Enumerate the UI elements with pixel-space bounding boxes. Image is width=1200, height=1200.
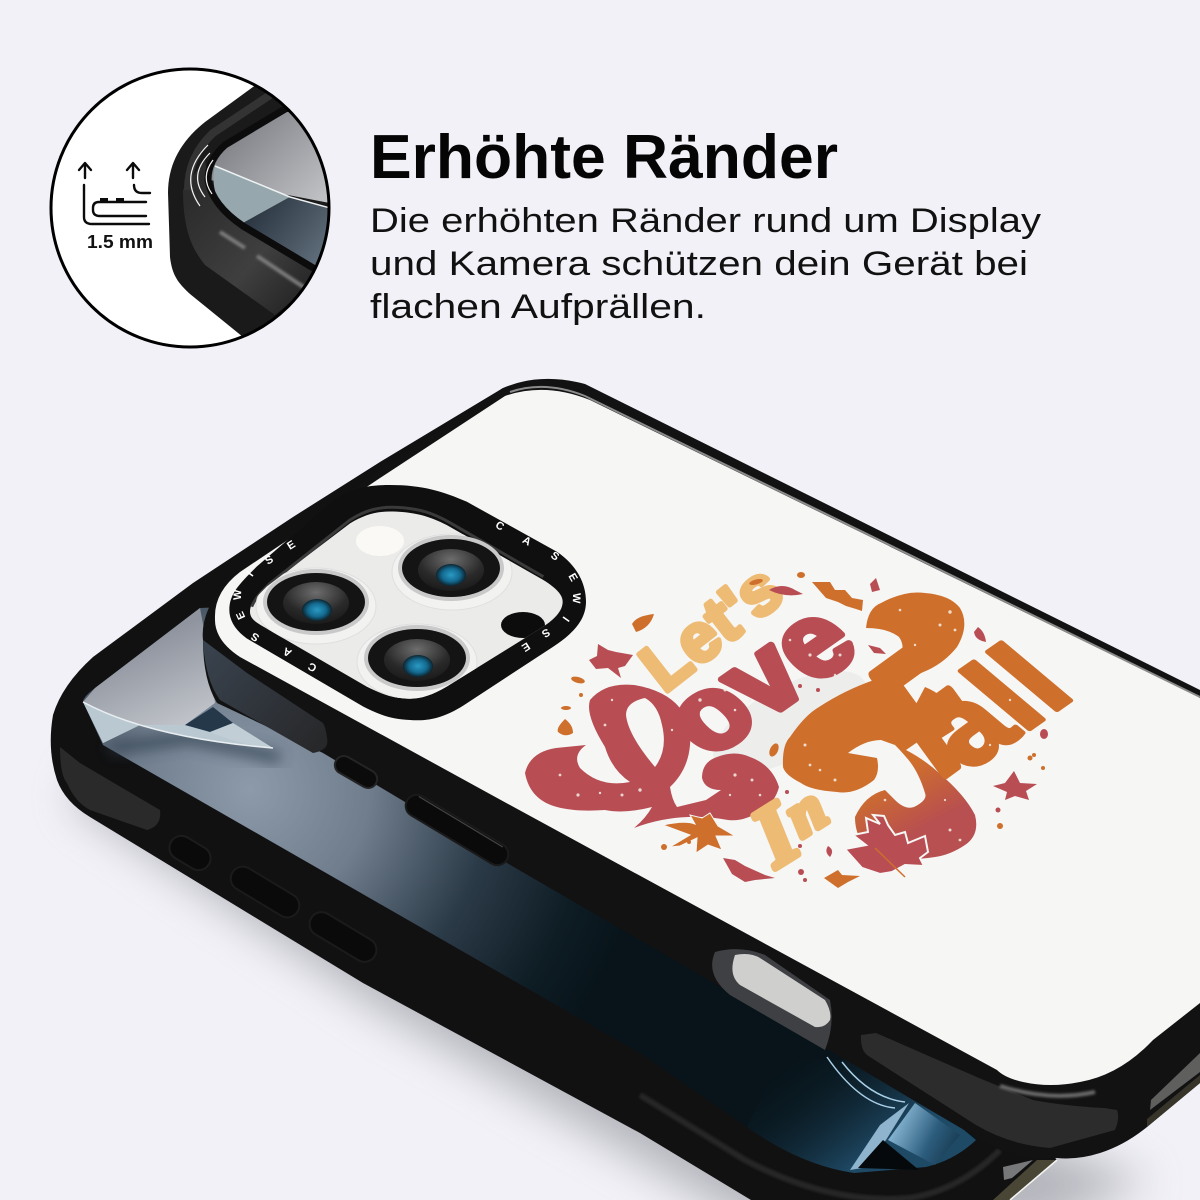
orange F flourish — [783, 592, 976, 859]
lower phone corner pad — [60, 747, 160, 830]
body text: Die erhöhten Ränder rund um Display — [370, 202, 1041, 240]
ring brand lettering: E — [234, 609, 248, 621]
lower phone bumper highlight — [640, 1095, 1000, 1199]
inset bumper lighter wall — [183, 160, 312, 315]
magsafe ghost shadow — [698, 650, 882, 794]
ring brand lettering: E — [519, 640, 532, 654]
volume up button — [226, 862, 304, 922]
speaker grill — [1150, 1053, 1200, 1110]
screen light beam right — [888, 1103, 960, 1165]
screen dark slate strip — [110, 738, 280, 758]
inset white disc — [51, 69, 329, 347]
left orange leaf — [632, 614, 654, 632]
inset pale wedge — [213, 166, 290, 223]
silver charging port piece — [1003, 1160, 1033, 1180]
ring brand lettering: W — [232, 589, 244, 600]
inset bumper — [168, 86, 328, 336]
oak leaf top — [812, 582, 863, 611]
right maple leaf — [993, 771, 1037, 800]
left corner pad — [203, 640, 327, 753]
ring brand lettering: I — [245, 570, 256, 579]
front phone white back surface — [215, 390, 1200, 1085]
screen thin blue curves — [827, 1057, 905, 1108]
ring brand lettering: E — [285, 538, 298, 552]
volume down button — [305, 908, 381, 966]
left maple leaf — [589, 644, 633, 678]
orange maple leaf — [663, 813, 735, 853]
distressed speckle texture — [559, 609, 1011, 841]
camera module — [229, 485, 586, 720]
flash — [356, 526, 404, 556]
word In: I — [734, 784, 817, 885]
word Love: ove — [637, 581, 880, 777]
body text — [370, 202, 1041, 326]
screen navy shape — [185, 707, 233, 732]
camera well — [250, 511, 563, 699]
ring brand lettering: A — [281, 644, 294, 659]
ring brand lettering: C — [306, 659, 319, 674]
letters all: all — [882, 623, 1098, 789]
inset top rim — [188, 95, 270, 190]
inset shock arcs — [191, 145, 213, 206]
ring brand lettering: S — [548, 550, 561, 564]
port surround — [712, 949, 832, 1050]
word Let's: Let's — [626, 550, 796, 706]
screen black triangle — [858, 1140, 919, 1170]
lower phone with screen side up — [51, 388, 1057, 1200]
screen pale curve — [210, 723, 273, 748]
ring brand lettering: I — [560, 614, 571, 623]
silver port — [732, 954, 830, 1027]
microphone hole — [501, 612, 545, 638]
left teardrop leaf — [558, 719, 573, 735]
red L flourish — [525, 685, 779, 828]
icon label: 1.5 mm — [87, 232, 153, 252]
front phone black case — [203, 379, 1200, 1158]
ring brand lettering: S — [249, 630, 262, 644]
ring brand lettering: S — [539, 626, 552, 640]
screen light beam left — [850, 1103, 909, 1170]
icon: raised edge diagram — [79, 163, 150, 224]
camera lens halos, flash and mic — [256, 526, 545, 700]
ring brand lettering: A — [520, 534, 533, 549]
inset white curve — [215, 166, 330, 208]
screen pale wedge — [83, 702, 273, 748]
bottom orange leaf — [824, 870, 860, 888]
lower phone screen — [83, 600, 1000, 1173]
case artwork: Let's Love In Fall — [525, 550, 1098, 888]
body text: flachen Aufprällen. — [370, 288, 706, 326]
word Love: L — [719, 767, 776, 817]
front phone — [203, 379, 1200, 1158]
leaf vein — [875, 848, 905, 877]
ring brand lettering: C — [493, 519, 506, 534]
camera ring — [229, 485, 586, 720]
microphone pill — [332, 753, 380, 791]
screen grey wallpaper wedge — [83, 608, 215, 743]
ring brand lettering: E — [566, 571, 580, 584]
screen white curve — [83, 702, 273, 748]
word In: n — [773, 774, 838, 850]
lower phone bumper — [51, 388, 1057, 1200]
inset glass grey — [212, 112, 328, 203]
lens one — [263, 569, 369, 635]
olive edge strip — [993, 1160, 1057, 1200]
inset dark wedge — [244, 198, 328, 265]
lens two — [398, 535, 504, 601]
front phone upper silver line — [510, 387, 1200, 697]
lens three — [364, 625, 470, 691]
right corner pad — [861, 1033, 1118, 1148]
action button — [165, 831, 215, 875]
phone drop shadow — [70, 760, 1150, 1200]
letter F stem: F — [845, 611, 1014, 808]
white edge line — [1010, 1160, 1057, 1200]
ring brand lettering: S — [263, 553, 276, 567]
inset side highlight — [220, 232, 305, 288]
ring brand lettering — [232, 519, 582, 674]
body text: und Kamera schützen dein Gerät bei — [370, 245, 1028, 283]
word Fall — [845, 611, 1098, 808]
heading: Erhöhte Ränder — [370, 123, 838, 192]
power button — [402, 791, 512, 869]
red small leaf top — [769, 586, 803, 595]
bottom oak leaf — [723, 858, 775, 882]
inset close-up of raised edge — [168, 86, 328, 336]
ring inner wall — [252, 507, 543, 607]
ring brand lettering: W — [570, 593, 582, 604]
small leaves and dots — [561, 572, 1045, 850]
lens halos — [256, 534, 512, 700]
screen blue tint — [747, 1060, 976, 1173]
lower rim highlight — [1000, 1086, 1095, 1096]
inset border — [51, 69, 329, 347]
large maple leaf — [845, 815, 928, 874]
rim olive edge — [1147, 1075, 1200, 1127]
inset detail circle — [50, 68, 330, 348]
inset black inner edge — [208, 106, 320, 272]
